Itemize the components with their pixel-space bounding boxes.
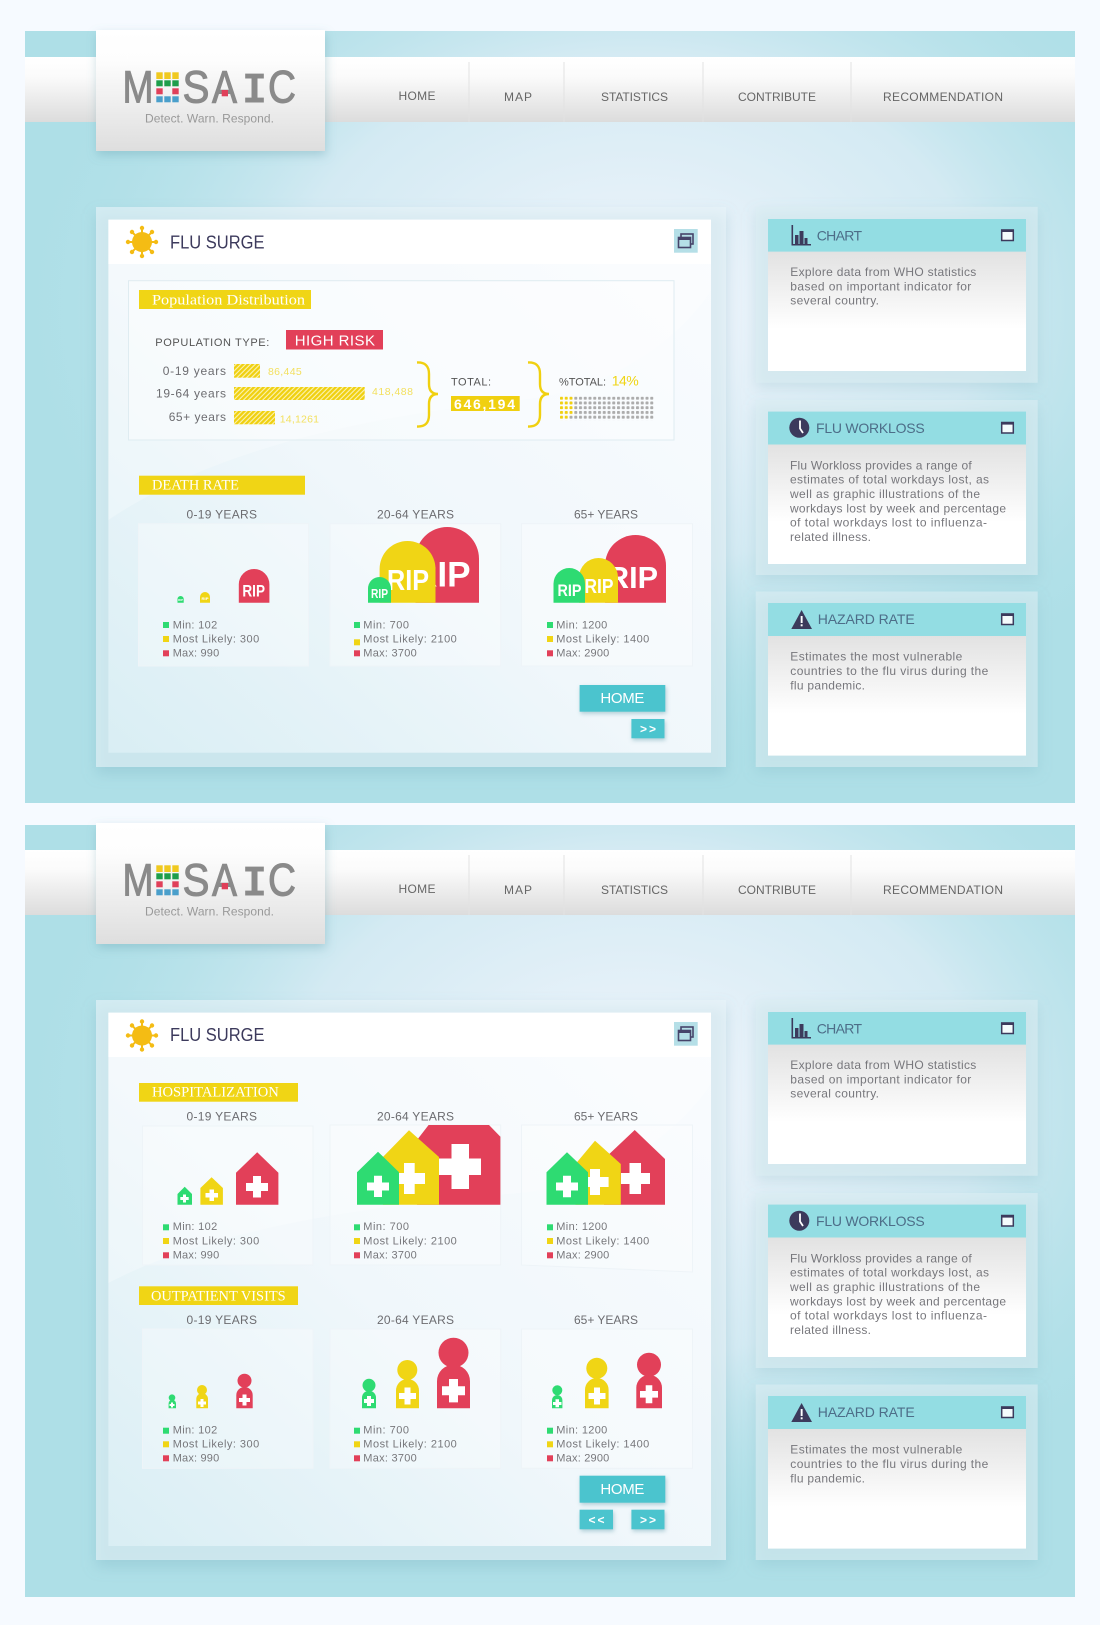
icon: clock — [789, 418, 809, 438]
person icons — [169, 1374, 253, 1408]
description: Flu Workloss provides a range of — [790, 458, 972, 472]
icon: bar chart — [792, 225, 811, 246]
tombstones: RIP — [607, 560, 658, 595]
sidebar — [756, 207, 1038, 773]
tombstones: RIP — [178, 598, 183, 602]
logo wordmark — [122, 62, 296, 117]
chart: outpatient 65+ years: 65+ YEARS — [574, 1313, 638, 1327]
house icons — [357, 1125, 500, 1205]
legend: Max: 3700 — [363, 1249, 417, 1261]
legend: Min: 1200 — [556, 1424, 607, 1436]
icon: warning — [791, 610, 812, 629]
chart: outpatient 0-19 years — [142, 1313, 313, 1468]
chart: outpatient 0-19 years: 0-19 YEARS — [186, 1313, 257, 1327]
panel: hazard rate — [756, 1384, 1038, 1566]
panel: flu surge main — [96, 1000, 726, 1567]
tombstones: RIP — [242, 581, 265, 600]
description: Flu Workloss provides a range of — [790, 1251, 972, 1265]
label: outpatient visits: OUTPATIENT VISITS — [151, 1288, 286, 1304]
total: TOTAL: — [451, 377, 491, 389]
description: Estimates the most vulnerable — [790, 650, 963, 664]
icon: window button — [674, 229, 698, 253]
legend — [163, 619, 259, 660]
bar chart: age groups: 0-19 years — [163, 364, 226, 378]
nav: home: HOME — [398, 89, 436, 103]
legend: Min: 700 — [363, 1424, 409, 1436]
chart: hospitalization 65+ years — [522, 1110, 692, 1272]
legend: Most Likely: 2100 — [363, 634, 457, 646]
legend: Max: 990 — [173, 648, 219, 660]
panel header — [108, 220, 711, 264]
heading: FLU WORKLOSS — [816, 420, 925, 436]
legend: Min: 102 — [173, 619, 217, 631]
description: countries to the flu virus during the — [790, 1457, 989, 1471]
tombstones: RIP — [202, 596, 209, 601]
nav: statistics: STATISTICS — [601, 883, 668, 897]
legend — [547, 1221, 649, 1261]
screen 1 backdrop — [25, 31, 1075, 803]
description: flu pandemic. — [790, 1471, 865, 1485]
legend: Max: 2900 — [556, 648, 609, 660]
logo wordmark: A — [212, 62, 237, 113]
bar chart: age groups: 19-64 years — [156, 387, 226, 401]
screen 1 — [25, 30, 1075, 803]
logo wordmark: S — [182, 855, 210, 906]
icon: minimize — [1001, 613, 1014, 624]
sidebar — [756, 1000, 1038, 1566]
bar chart: age groups — [156, 364, 413, 426]
icon: window button — [674, 1022, 698, 1046]
legend: Most Likely: 300 — [173, 1439, 259, 1451]
heading: CHART — [817, 1020, 862, 1036]
icon: minimize — [1001, 1406, 1014, 1418]
chart: death rate 65+ years — [522, 508, 692, 666]
dot matrix — [560, 397, 655, 420]
chart: outpatient 20-64 years — [330, 1313, 501, 1468]
label: hospitalization: HOSPITALIZATION — [152, 1085, 279, 1101]
chart: death rate 20-64 years: 20-64 YEARS — [377, 508, 454, 522]
label: population distribution — [139, 290, 311, 309]
description: countries to the flu virus during the — [790, 664, 989, 678]
legend: Most Likely: 1400 — [556, 634, 649, 646]
button: home: HOME — [600, 1481, 644, 1498]
description: well as graphic illustrations of the — [789, 487, 980, 501]
description — [790, 1443, 989, 1485]
icon: minimize — [1001, 1215, 1014, 1226]
total — [451, 377, 520, 412]
legend — [163, 1424, 259, 1465]
panel: hazard rate — [756, 592, 1038, 772]
nav: home: HOME — [398, 882, 436, 896]
navigation bar — [25, 850, 1075, 915]
description: workdays lost by week and percentage — [789, 1294, 1006, 1308]
description: Estimates the most vulnerable — [790, 1443, 963, 1457]
description: several country. — [790, 1087, 879, 1101]
logo wordmark: C — [268, 855, 296, 906]
population type: HIGH RISK — [295, 333, 375, 350]
legend: Most Likely: 1400 — [556, 1439, 649, 1451]
description: flu pandemic. — [790, 678, 865, 692]
logo card — [96, 823, 325, 944]
panel: flu workloss — [756, 1193, 1038, 1373]
description — [790, 265, 976, 308]
legend: Min: 700 — [363, 619, 409, 631]
legend: Min: 1200 — [556, 1221, 607, 1233]
description: estimates of total workdays lost, as — [790, 473, 989, 487]
bar chart: age groups: 65+ years — [169, 410, 226, 424]
button: next: >> — [640, 1513, 656, 1527]
navigation bar — [25, 57, 1075, 122]
brace — [417, 362, 438, 427]
chart: outpatient 65+ years — [522, 1313, 692, 1468]
legend: Most Likely: 300 — [173, 634, 259, 646]
legend — [547, 1424, 649, 1465]
nav: map: MAP — [504, 90, 532, 104]
panel: flu surge main — [96, 207, 726, 774]
legend: Min: 102 — [173, 1221, 217, 1233]
chart: death rate 65+ years: 65+ YEARS — [574, 508, 638, 522]
house icons — [546, 1130, 665, 1205]
legend — [547, 619, 649, 660]
bar chart: age groups: 418,488 — [372, 386, 413, 398]
description: several country. — [790, 294, 879, 308]
tombstones: RIP — [558, 581, 582, 600]
heading: CHART — [817, 228, 862, 244]
nav: statistics: STATISTICS — [601, 90, 668, 104]
chart: death rate 20-64 years — [330, 508, 501, 666]
legend: Min: 700 — [363, 1221, 409, 1233]
person icons — [362, 1338, 470, 1408]
nav: contribute: CONTRIBUTE — [738, 883, 816, 897]
logo card — [96, 30, 325, 151]
button: home — [580, 685, 665, 712]
icon: minimize — [1001, 422, 1014, 433]
description: well as graphic illustrations of the — [789, 1280, 980, 1294]
description — [789, 458, 1006, 544]
tagline: Detect. Warn. Respond. — [145, 111, 274, 125]
chart: hospitalization 0-19 years — [142, 1110, 313, 1265]
population type — [155, 330, 383, 350]
legend — [163, 1221, 259, 1261]
panel title: FLU SURGE — [170, 232, 264, 252]
panel: flu workloss — [756, 400, 1038, 580]
nav: recommendation: RECOMMENDATION — [883, 90, 1003, 104]
nav: map: MAP — [504, 883, 532, 897]
legend: Most Likely: 2100 — [363, 1235, 457, 1247]
icon: virus sun — [126, 226, 158, 258]
description: related illness. — [790, 530, 871, 544]
heading: HAZARD RATE — [818, 1404, 915, 1420]
icon: virus sun — [126, 1019, 158, 1052]
total: 646,194 — [454, 396, 515, 412]
label: hospitalization — [139, 1083, 298, 1102]
description: of total workdays lost to influenza- — [790, 516, 987, 530]
chart: death rate 0-19 years — [138, 508, 308, 666]
legend: Max: 2900 — [556, 1249, 609, 1261]
logo wordmark: C — [268, 62, 296, 113]
icon: bar chart — [792, 1018, 811, 1038]
chart: hospitalization 65+ years: 65+ YEARS — [574, 1110, 638, 1124]
chart: hospitalization 20-64 years: 20-64 YEARS — [377, 1110, 454, 1124]
description — [790, 650, 989, 692]
button: home: HOME — [600, 690, 644, 707]
legend: Max: 2900 — [556, 1453, 609, 1465]
label: population distribution: Population Distribution — [152, 292, 306, 308]
icon: warning — [791, 1403, 812, 1422]
button: next — [631, 1510, 664, 1529]
legend: Min: 102 — [173, 1424, 217, 1436]
description — [789, 1251, 1006, 1337]
logo wordmark: M — [122, 855, 154, 906]
legend — [354, 619, 457, 660]
icon: minimize — [1001, 229, 1014, 240]
description: of total workdays lost to influenza- — [790, 1309, 987, 1323]
tombstones: RIP — [387, 565, 429, 597]
chart: outpatient 20-64 years: 20-64 YEARS — [377, 1313, 454, 1327]
tombstones — [554, 535, 666, 603]
bar chart: age groups: 14,1261 — [280, 414, 319, 426]
description — [790, 1058, 976, 1101]
tombstones: RIP — [412, 556, 471, 595]
chart: hospitalization 0-19 years: 0-19 YEARS — [186, 1110, 257, 1124]
percent total — [559, 373, 655, 420]
legend — [354, 1424, 457, 1465]
button: previous: << — [588, 1513, 604, 1527]
description: Explore data from WHO statistics — [790, 1058, 976, 1072]
tombstones — [178, 569, 269, 603]
heading: HAZARD RATE — [818, 611, 915, 627]
panel: population distribution — [128, 281, 674, 440]
screen 2 — [25, 823, 1075, 1597]
nav: contribute: CONTRIBUTE — [738, 90, 816, 104]
population type: POPULATION TYPE: — [155, 337, 269, 349]
heading: FLU WORKLOSS — [816, 1213, 925, 1229]
logo wordmark — [122, 855, 296, 910]
legend: Most Likely: 1400 — [556, 1235, 649, 1247]
house icons — [178, 1152, 278, 1205]
percent total: %TOTAL: — [559, 377, 606, 389]
tombstones — [368, 527, 479, 603]
icon: minimize — [1001, 1022, 1014, 1034]
button: home — [580, 1476, 665, 1503]
legend: Max: 3700 — [363, 1453, 417, 1465]
legend: Max: 3700 — [363, 648, 417, 660]
chart: death rate 0-19 years: 0-19 YEARS — [186, 508, 257, 522]
tagline: Detect. Warn. Respond. — [145, 904, 274, 918]
description: estimates of total workdays lost, as — [790, 1266, 989, 1280]
person icons — [552, 1353, 662, 1408]
description: related illness. — [790, 1323, 871, 1337]
screen 2 backdrop — [25, 825, 1075, 1597]
logo wordmark: M — [122, 62, 154, 113]
label: death rate: DEATH RATE — [152, 478, 239, 494]
legend — [354, 1221, 457, 1261]
logo wordmark: A — [212, 855, 237, 906]
panel title: FLU SURGE — [170, 1025, 264, 1045]
icon: clock — [789, 1211, 809, 1231]
nav: recommendation: RECOMMENDATION — [883, 883, 1003, 897]
tombstones: RIP — [371, 586, 388, 601]
panel: chart — [756, 207, 1038, 388]
panel: chart — [756, 1000, 1038, 1181]
description: workdays lost by week and percentage — [789, 501, 1006, 515]
legend: Most Likely: 300 — [173, 1235, 259, 1247]
logo wordmark: I — [242, 860, 267, 910]
legend: Max: 990 — [173, 1249, 219, 1261]
logo wordmark: S — [182, 62, 210, 113]
button: next — [631, 719, 664, 738]
bar chart: age groups: 86,445 — [268, 366, 302, 378]
legend: Max: 990 — [173, 1453, 219, 1465]
description: based on important indicator for — [790, 1072, 971, 1086]
legend: Most Likely: 2100 — [363, 1439, 457, 1451]
description: based on important indicator for — [790, 279, 971, 293]
percent total: 14% — [612, 373, 639, 389]
tombstones: RIP — [584, 576, 614, 598]
logo wordmark: I — [242, 67, 267, 117]
button: previous — [580, 1510, 613, 1529]
panel header — [108, 1013, 711, 1057]
chart: hospitalization 20-64 years — [330, 1110, 501, 1265]
legend: Min: 1200 — [556, 619, 607, 631]
brace — [528, 362, 549, 427]
description: Explore data from WHO statistics — [790, 265, 976, 279]
button: next: >> — [640, 722, 656, 736]
label: death rate — [139, 476, 305, 495]
